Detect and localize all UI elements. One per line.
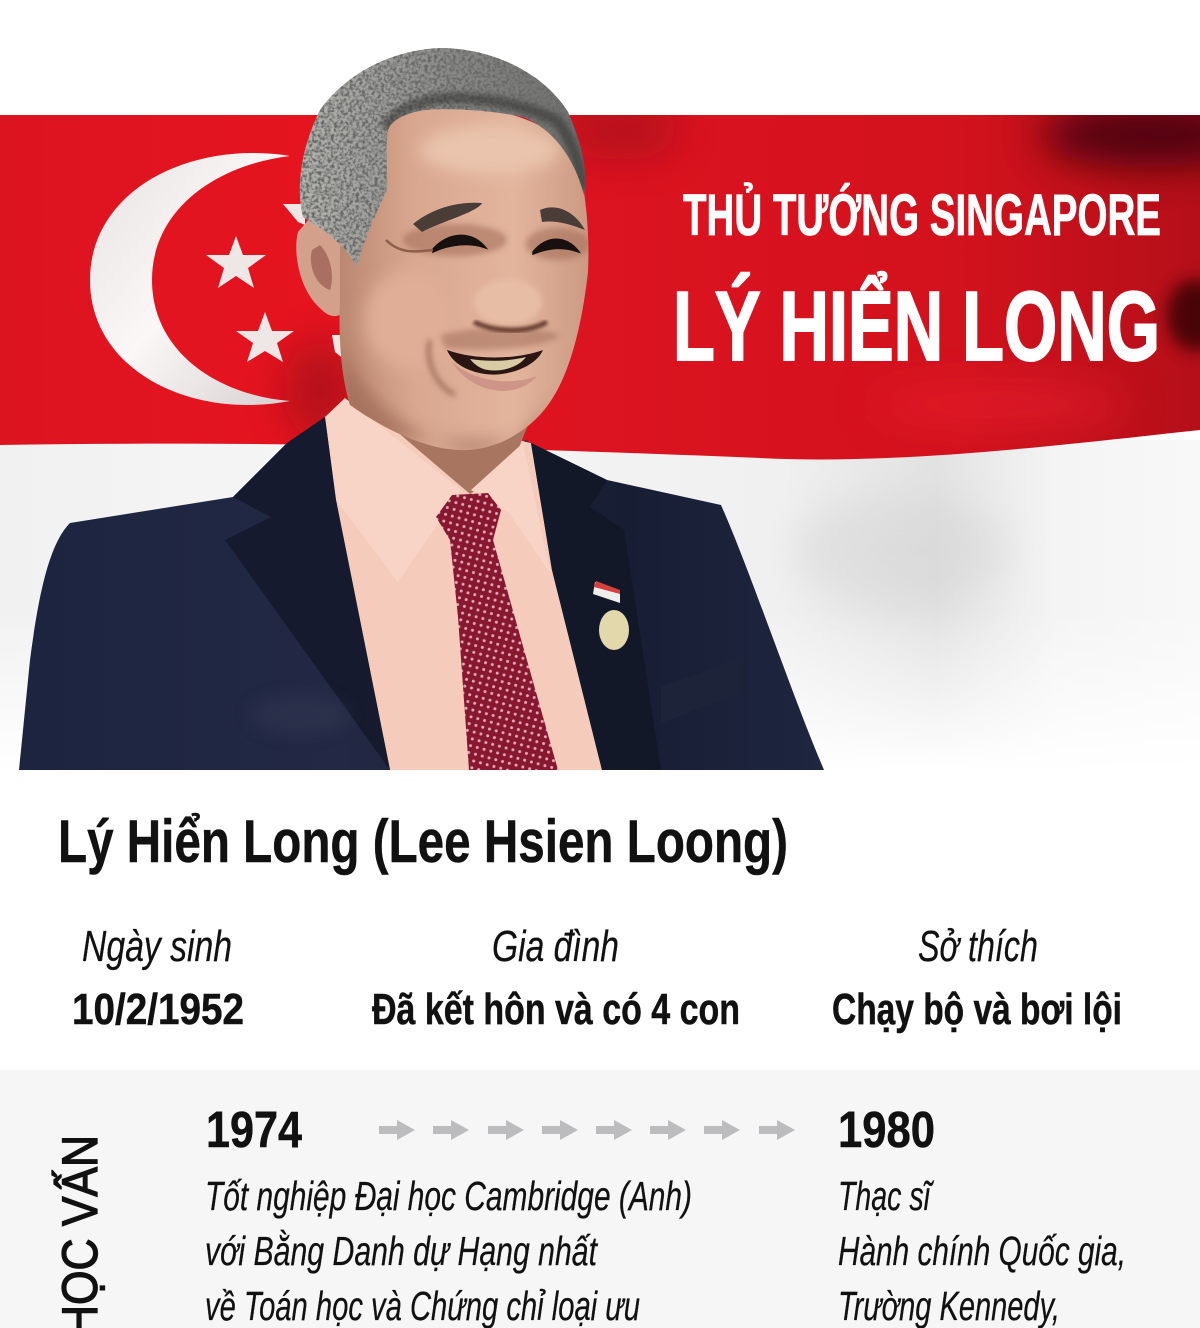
ear: [296, 218, 347, 316]
year 1980: 1980: [838, 1101, 935, 1158]
cheek tone: [361, 274, 412, 366]
suit highlight: [250, 695, 350, 735]
hair: [295, 45, 590, 270]
forehead light: [420, 126, 560, 174]
name heading: Lý Hiển Long (Lee Hsien Loong): [58, 808, 788, 875]
left lapel: [225, 417, 390, 770]
1980 description: Trường Kennedy,: [838, 1283, 1060, 1328]
suit: [19, 417, 824, 770]
jaw shadow: [341, 355, 546, 450]
shirt: [325, 400, 602, 770]
hero title: [673, 183, 1161, 381]
panel: hero banner: [0, 45, 1200, 772]
1974 description: với Bằng Danh dự Hạng nhất: [205, 1228, 598, 1274]
crescent: [90, 153, 290, 405]
1974 description: [205, 1173, 692, 1328]
year 1974: 1974: [206, 1101, 303, 1158]
fact: family: [372, 922, 740, 1034]
fact: hobbies: Sở thích: [918, 922, 1038, 971]
timeline arrows: [379, 1120, 795, 1140]
eye socket shade: [403, 224, 507, 256]
right lapel: [531, 443, 661, 770]
head: [339, 104, 590, 452]
1980 description: [838, 1173, 1126, 1328]
panel: education: [0, 1070, 1200, 1328]
eyes and brows: [386, 203, 585, 254]
fact: birth date: 10/2/1952: [72, 985, 244, 1034]
neck: [395, 420, 530, 494]
1974 description: về Toán học và Chứng chỉ loại ưu: [205, 1283, 640, 1328]
smile: [429, 340, 543, 395]
fact: family: Gia đình: [492, 922, 619, 971]
fact: birth date: Ngày sinh: [82, 922, 232, 971]
pocket: [661, 657, 742, 723]
flag background: [0, 100, 1200, 772]
upper lip shade: [440, 328, 560, 350]
stars: [206, 204, 345, 362]
nose: [474, 280, 547, 330]
1974 description: Tốt nghiệp Đại học Cambridge (Anh): [205, 1173, 692, 1219]
fact: birth date: [72, 922, 244, 1034]
tie: [436, 493, 558, 770]
fact: hobbies: [832, 922, 1122, 1034]
1980 description: Thạc sĩ: [838, 1173, 935, 1219]
right collar: [471, 443, 550, 573]
left collar: [325, 398, 461, 582]
portrait: [19, 45, 824, 770]
panel: personal facts: [72, 922, 1122, 1034]
fact: family: Đã kết hôn và có 4 con: [372, 985, 740, 1034]
pin badges: [593, 581, 629, 650]
